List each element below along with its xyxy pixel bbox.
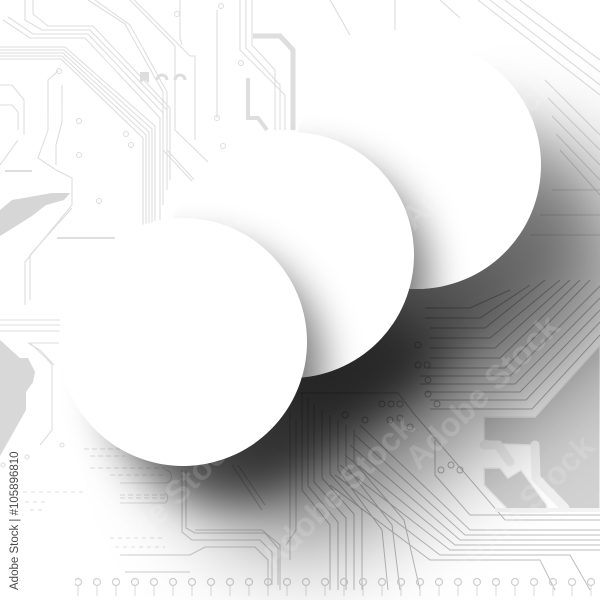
stock watermarks: Adobe Stock — [192, 102, 362, 271]
drop shadow behind the circles — [228, 212, 520, 430]
stock watermarks: Adobe Stock — [252, 407, 422, 576]
top-right traces — [330, 0, 600, 235]
copper pads, lower right — [484, 345, 600, 512]
front circle — [59, 218, 307, 466]
middle circle — [192, 132, 414, 378]
stock watermarks: Adobe Stock — [0, 7, 167, 176]
shadow on back circle — [298, 130, 456, 289]
stock watermarks: Adobe Stock — [2, 289, 172, 458]
row of via pads along the bottom — [75, 570, 600, 600]
shadow on middle circle — [178, 216, 350, 378]
stock watermarks: Adobe Stock — [432, 427, 600, 596]
stock watermarks: Adobe Stock — [392, 67, 562, 236]
upper-right bus of traces — [342, 280, 600, 473]
lower-right fan of traces — [300, 392, 600, 590]
top-left trace bundle — [0, 0, 285, 305]
left-side board section — [0, 320, 172, 547]
thick traces and filled copper shapes, top-left — [0, 36, 293, 238]
stock watermarks: Adobe Stock — [77, 422, 247, 591]
stock image id label: Adobe Stock | #105896810 — [9, 451, 21, 590]
back circle — [298, 73, 541, 289]
stock watermarks: Adobe Stock — [397, 307, 567, 476]
lower-middle trace bundles — [120, 410, 296, 590]
